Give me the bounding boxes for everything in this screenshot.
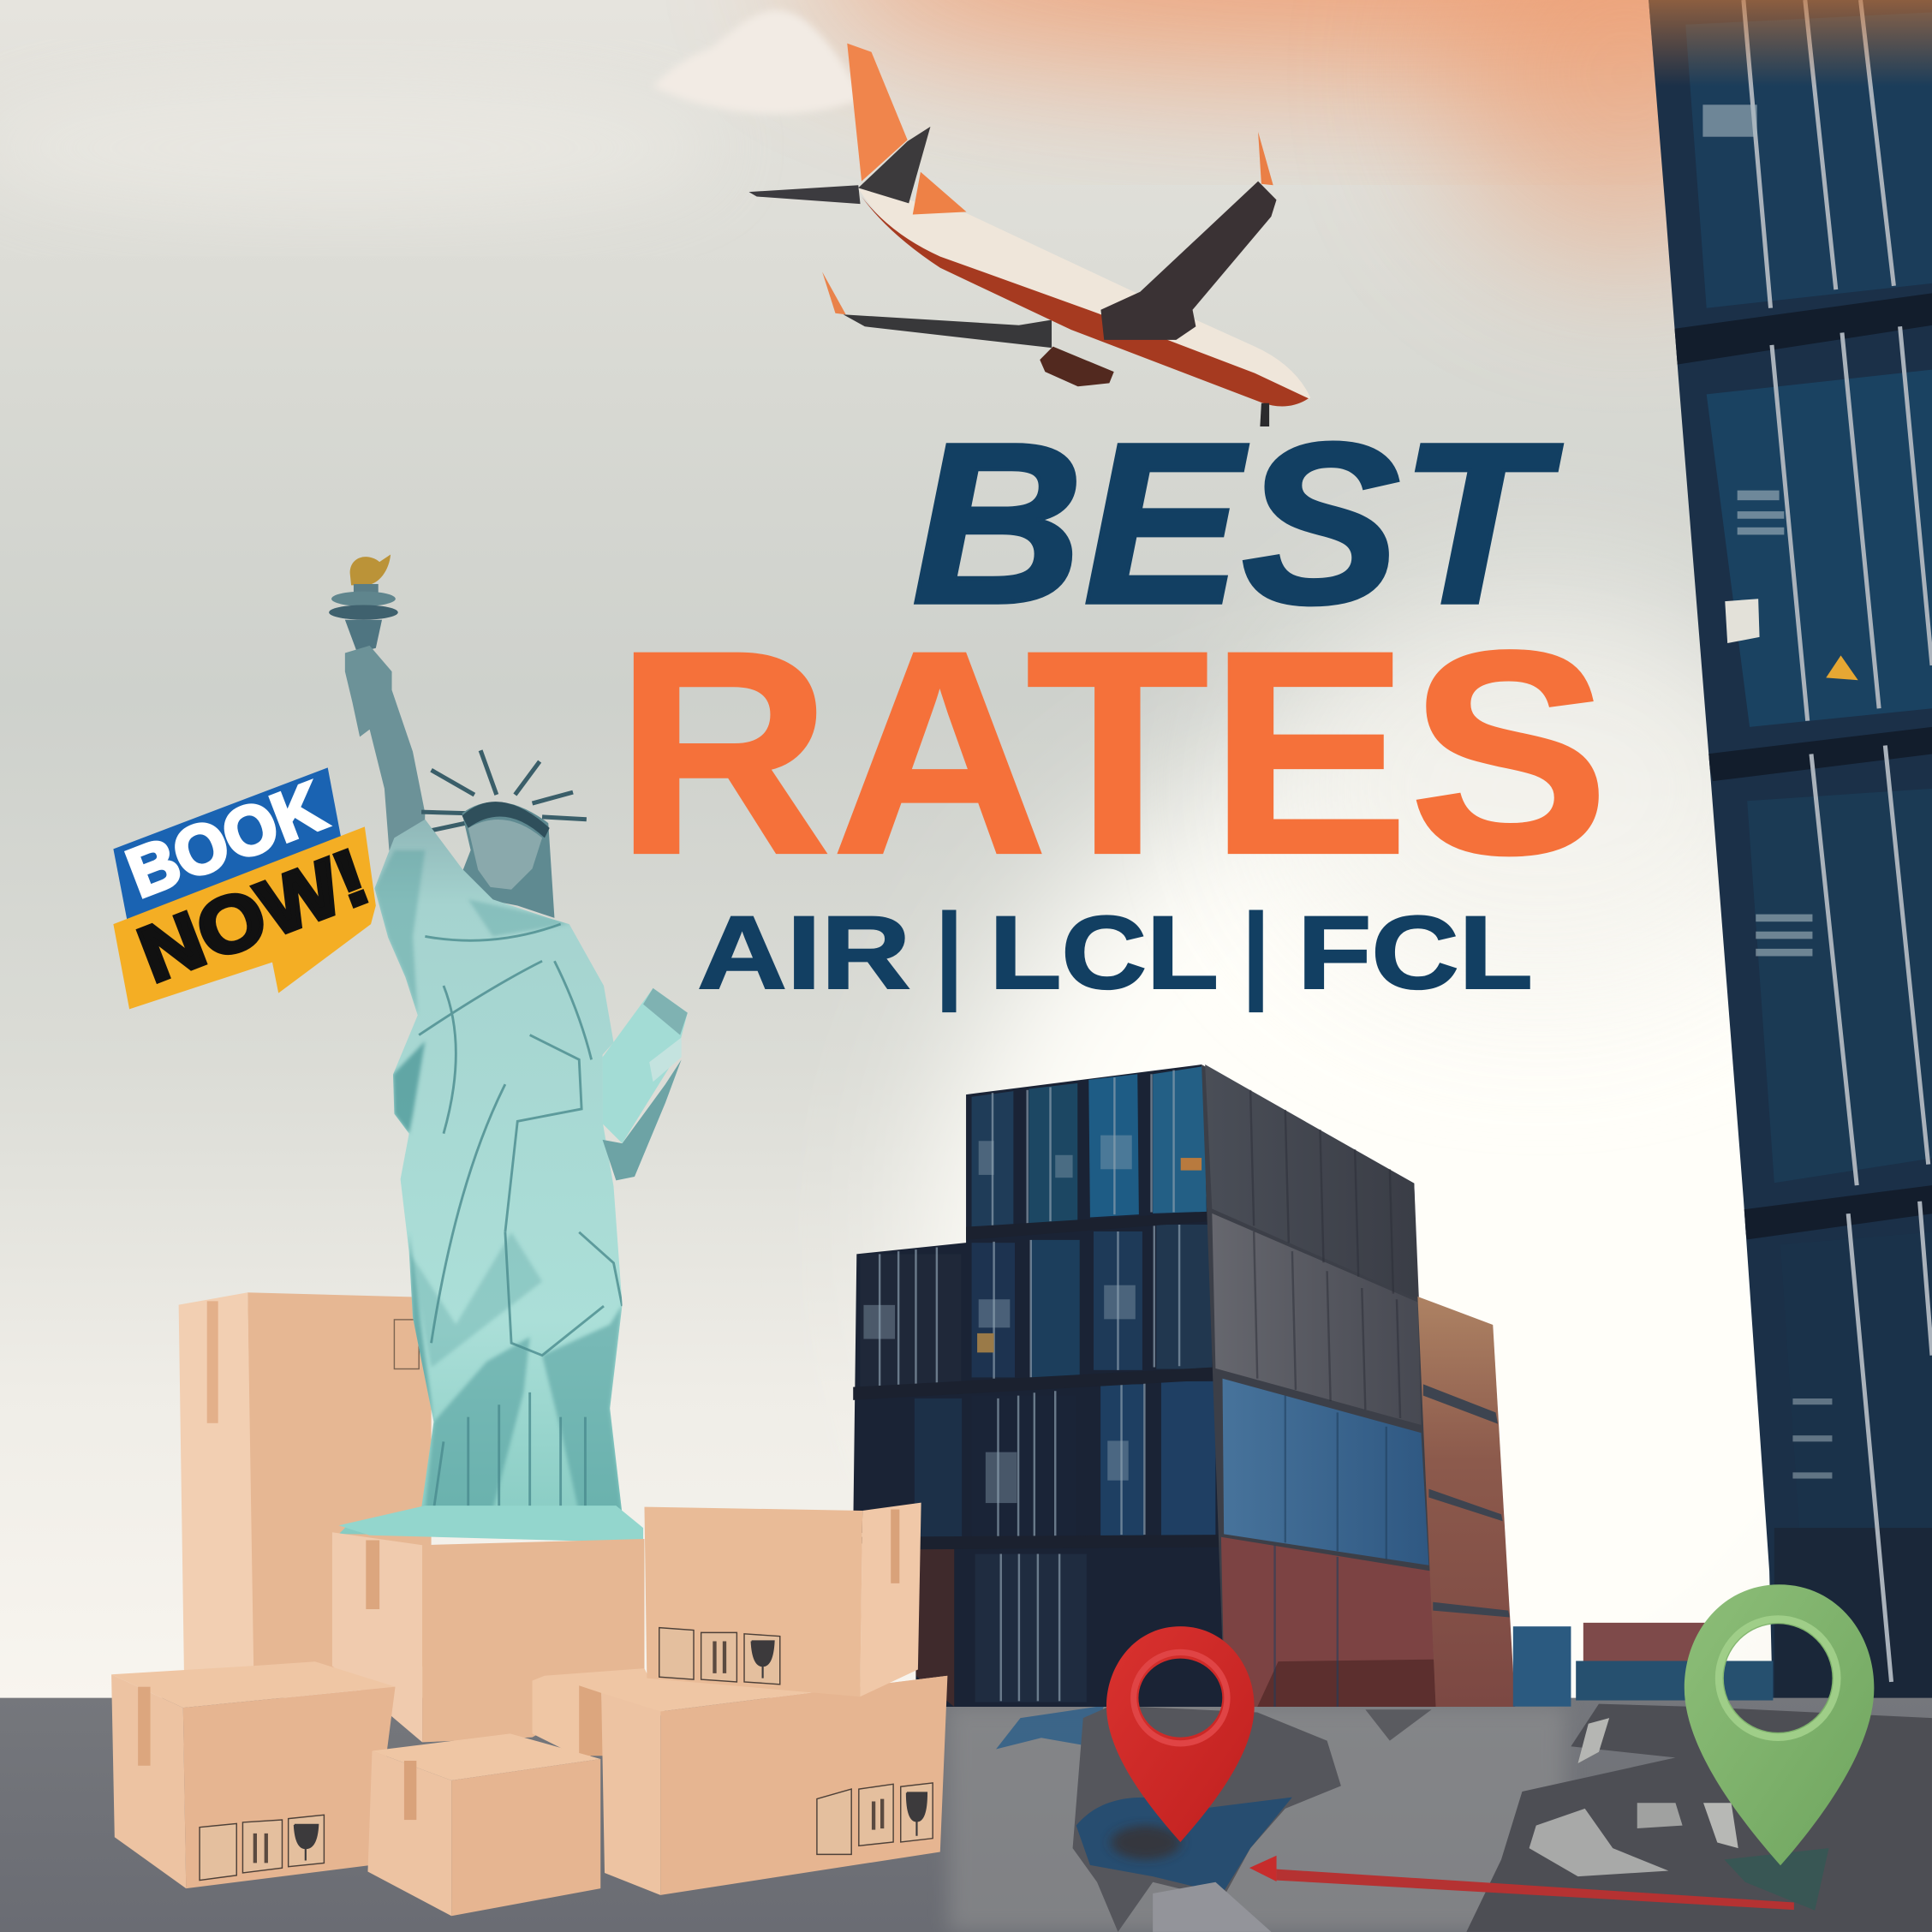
distant containers xyxy=(1576,1623,1773,1701)
tail stabiliser xyxy=(858,127,930,203)
crown rays xyxy=(421,750,587,831)
landing gear xyxy=(1260,403,1269,426)
subheading: AIR | LCL | FCL: FCL xyxy=(1297,895,1533,1011)
box: center under statue xyxy=(332,1532,644,1742)
ground xyxy=(0,1698,1932,1932)
far wing xyxy=(844,314,1052,348)
box: upper-right xyxy=(644,1503,921,1696)
raised arm xyxy=(345,646,425,853)
crown band xyxy=(462,802,550,838)
head xyxy=(462,802,554,918)
cardboard box: tall back xyxy=(179,1292,432,1683)
green location pin xyxy=(1685,1584,1874,1865)
fuselage belly xyxy=(862,197,1309,406)
NOW label: NOW! xyxy=(128,832,379,999)
rear orange stripe xyxy=(913,172,967,215)
pedestal base xyxy=(339,1506,643,1542)
face xyxy=(468,820,542,890)
book xyxy=(603,988,688,1143)
hazard label xyxy=(1826,655,1858,680)
stack side face: containers xyxy=(1202,1064,1494,1707)
tower windows xyxy=(1702,104,1832,1479)
world map on floor xyxy=(996,1704,1932,1932)
cloud xyxy=(653,10,862,114)
stack front face xyxy=(853,1064,1226,1707)
box: small front xyxy=(367,1733,600,1916)
engine xyxy=(1040,347,1114,386)
box: lower-right large xyxy=(533,1668,947,1895)
red location pin xyxy=(1106,1626,1255,1842)
right container tower xyxy=(1639,0,1932,1725)
robe silhouette xyxy=(339,820,643,1536)
near wing xyxy=(1100,182,1277,340)
tail fin xyxy=(847,44,908,182)
cardboard boxes front xyxy=(111,1503,947,1916)
torch xyxy=(329,554,398,653)
left stabiliser xyxy=(748,185,861,204)
subheading: AIR | LCL | FCL: | xyxy=(1241,890,1271,1012)
tower lashing bars xyxy=(1744,0,1932,1682)
handling icons xyxy=(200,1815,324,1881)
handling icons xyxy=(659,1628,780,1685)
robe folds xyxy=(374,850,623,1514)
airplane xyxy=(748,44,1310,426)
box: lower-left xyxy=(111,1661,396,1888)
book arm xyxy=(603,1059,682,1180)
subheading: AIR | LCL | FCL: LCL xyxy=(989,895,1219,1011)
subheading: AIR | LCL | FCL: | xyxy=(934,890,964,1012)
fuselage xyxy=(858,188,1310,406)
low blue container xyxy=(1513,1626,1571,1707)
tower panels xyxy=(1685,12,1932,308)
tower dark bands xyxy=(1663,293,1932,365)
blue banner xyxy=(113,767,342,919)
heading: RATES: RATES xyxy=(615,591,1609,915)
route arrow xyxy=(1249,1856,1794,1910)
statue of liberty xyxy=(329,554,688,1542)
rear brown container stack xyxy=(1417,1297,1515,1707)
BOOK label: BOOK xyxy=(117,768,335,913)
yellow banner xyxy=(113,826,376,1009)
badge: book now xyxy=(113,767,379,1009)
main container stack xyxy=(853,1064,1773,1707)
handling icons xyxy=(817,1783,933,1854)
subheading: AIR | LCL | FCL xyxy=(697,890,1533,1012)
heading: BEST: BEST xyxy=(912,396,1563,652)
subheading: AIR | LCL | FCL: AIR xyxy=(697,895,910,1011)
